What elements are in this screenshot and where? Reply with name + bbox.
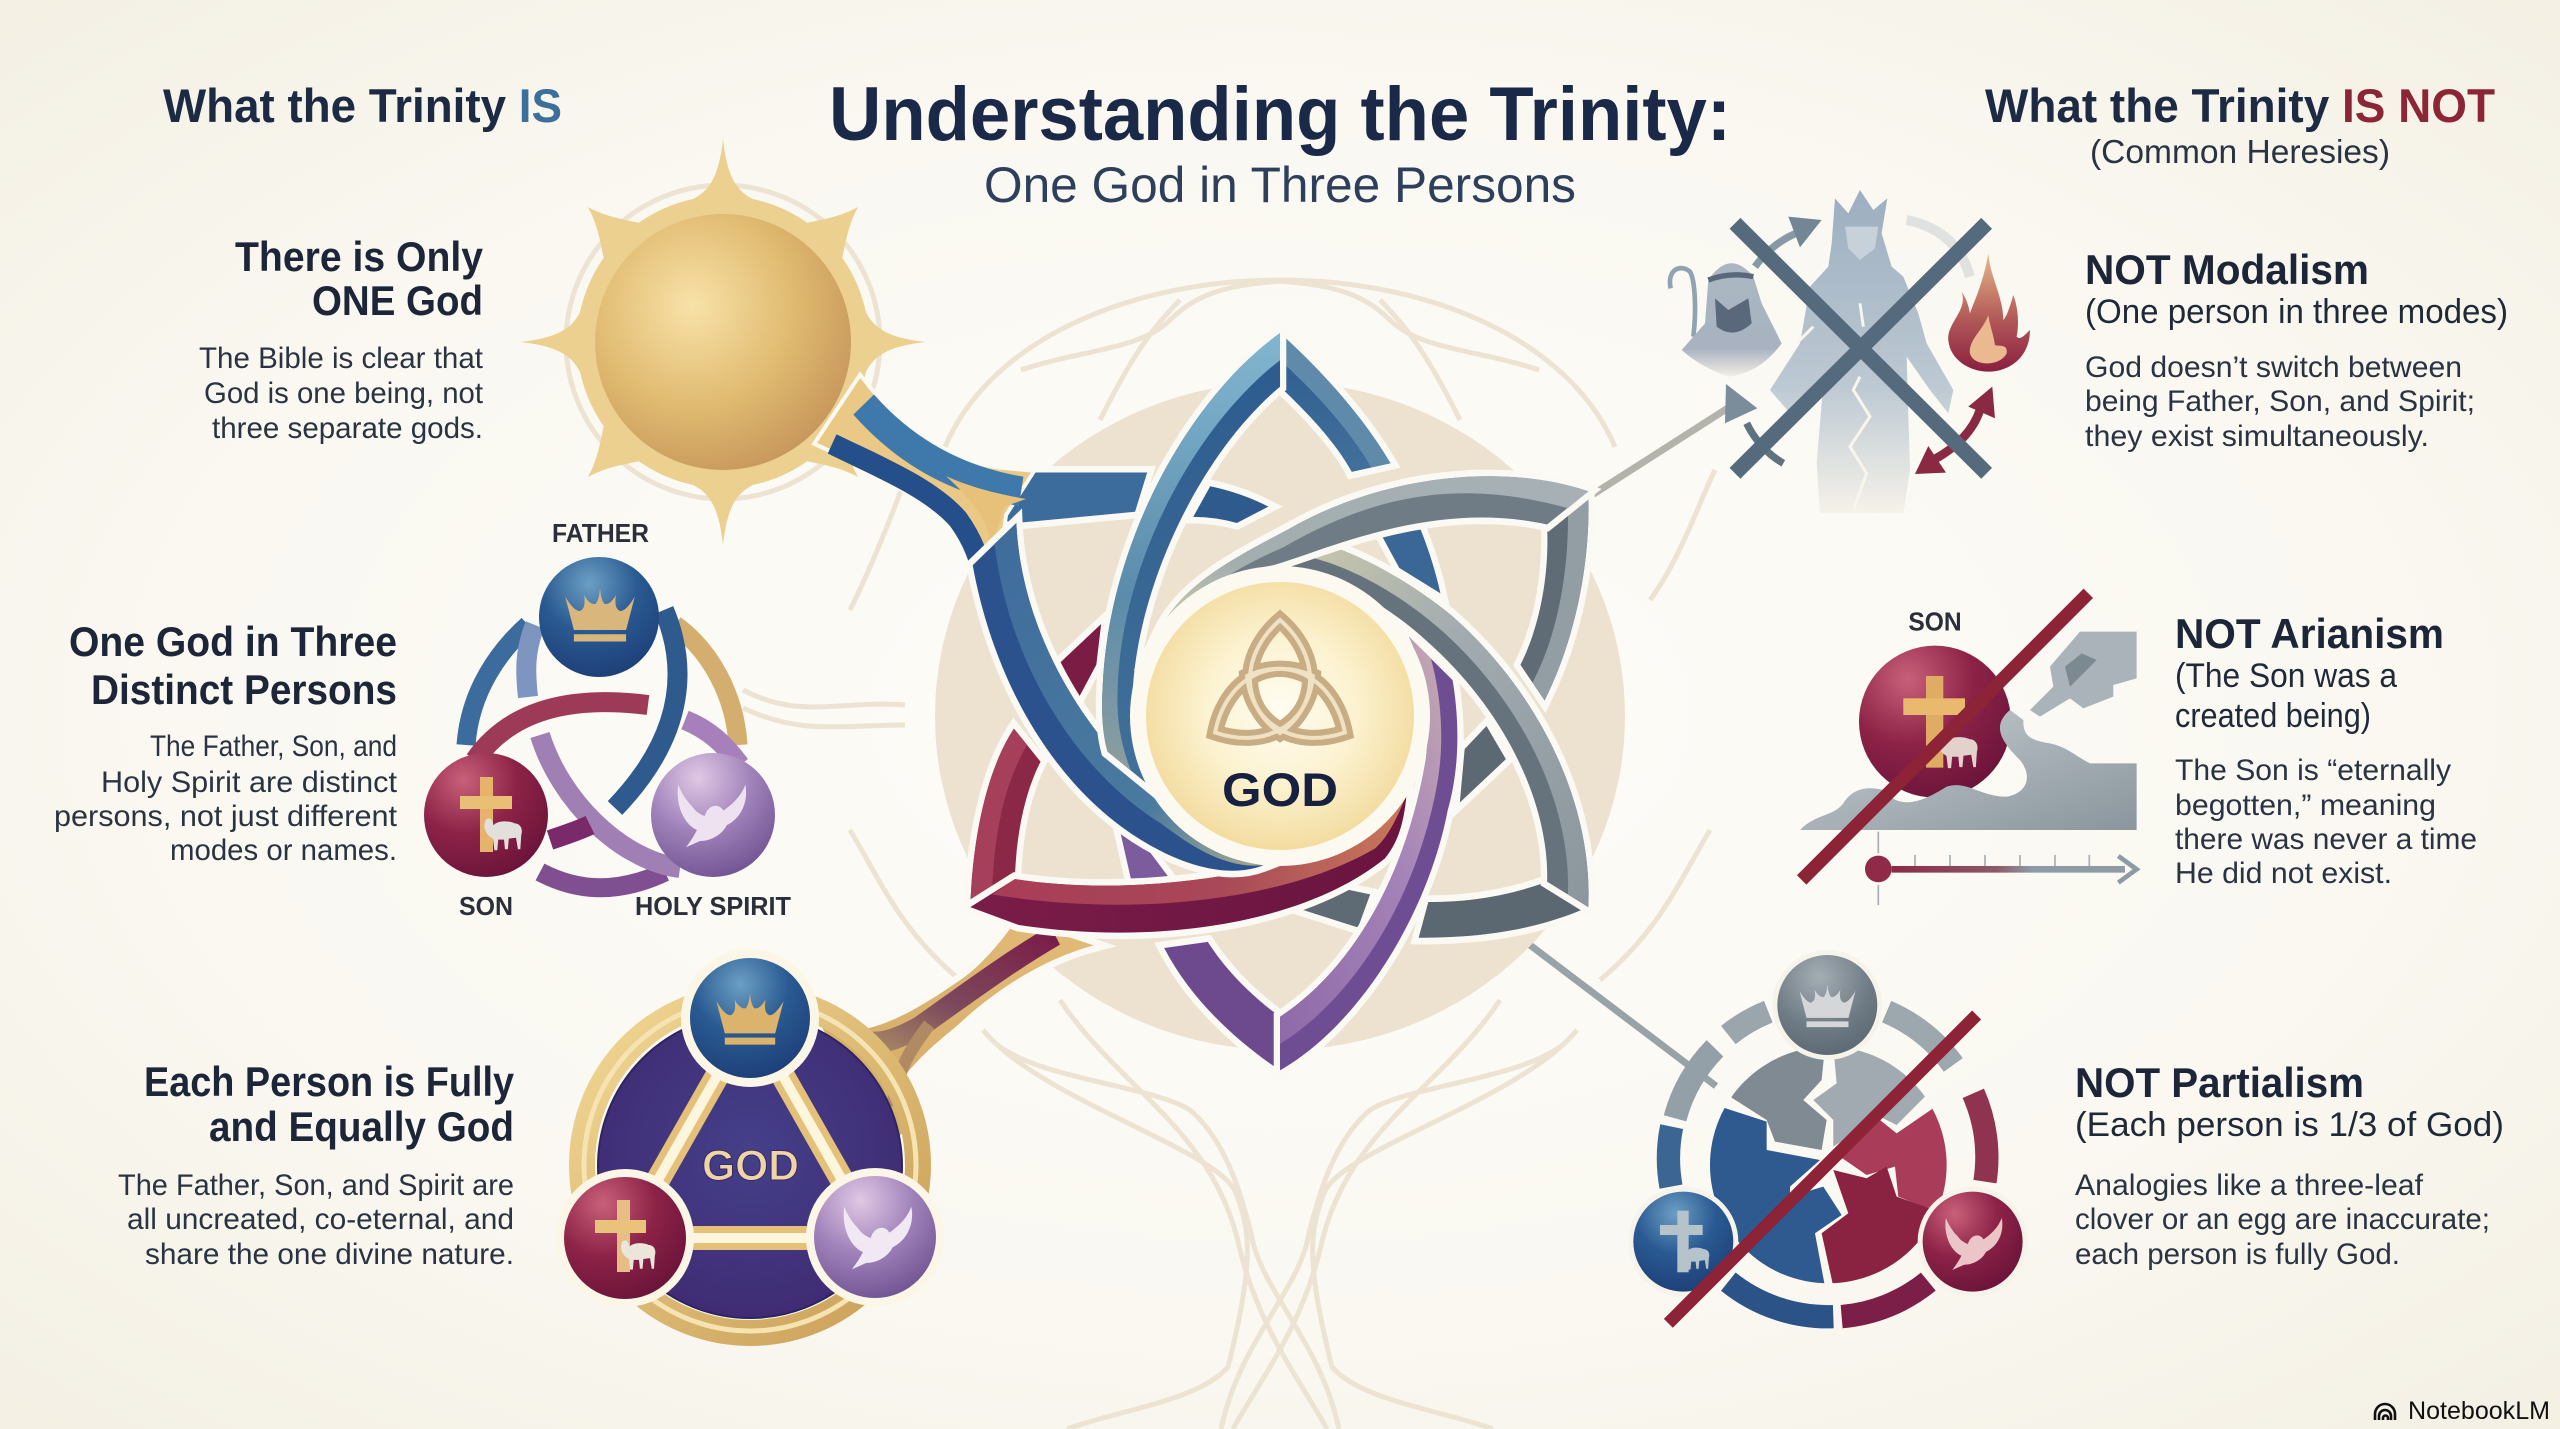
band: blue upper-left short arm and piece (997, 472, 1268, 523)
band: red short arm and piece (970, 624, 1101, 907)
text block: not modalism (2085, 246, 2508, 453)
text block: each person fully God: Each Person is Fully (144, 1058, 515, 1105)
text block: only one God: ONE God (312, 277, 483, 324)
icon: flame (1948, 253, 2030, 372)
band: blue top right arm and piece (1280, 333, 1440, 593)
text block: only one God: three separate gods. (212, 412, 483, 445)
text block: one God in three distinct persons: Holy Spirit are distinct (101, 766, 398, 799)
logo: NotebookLM: NotebookLM (2408, 1397, 2550, 1425)
text block: not partialism: Analogies like a three-leaf (2075, 1169, 2424, 1202)
figure: shepherd with staff (1670, 263, 1782, 377)
diagram: Arianism crossed out (1800, 593, 2137, 905)
text block: not Arianism (2175, 610, 2477, 890)
text block: one God in three distinct persons: The Father, Son, and (150, 730, 397, 763)
text block: each person fully God: all uncreated, co-eternal, and (127, 1203, 514, 1236)
text block: only one God (199, 233, 484, 445)
text block: not Arianism: begotten,” meaning (2175, 789, 2436, 822)
node: Father (539, 557, 659, 677)
text block: not partialism: clover or an egg are inaccurate; (2075, 1203, 2490, 1236)
band: red long arc (970, 795, 1407, 933)
band: grey lower-right short arm and piece (1302, 882, 1588, 938)
icon: sun representing one God (520, 139, 926, 545)
text block: one God in three distinct persons: Distinct Persons (91, 666, 397, 713)
text block: not Arianism: He did not exist. (2175, 857, 2392, 890)
heading: what the Trinity is not: What the Trinity IS NOT (1985, 79, 2495, 132)
arrow: grey upper (1755, 217, 1822, 267)
beige disc (935, 382, 1625, 1050)
text block: not modalism: (One person in three modes) (2085, 293, 2508, 331)
diagram: equal persons gold panel (556, 949, 944, 1333)
node: Holy Spirit (651, 753, 775, 877)
gold ring (582, 997, 918, 1333)
node: Holy Spirit (806, 1168, 944, 1306)
arrow: connector to modalism (1592, 408, 1728, 495)
band: grey upper-right long arc (1159, 476, 1588, 632)
text block: not partialism: (Each person is 1/3 of God) (2075, 1106, 2504, 1144)
node: Father greyed (1772, 950, 1882, 1060)
text block: only one God: There is Only (235, 233, 484, 280)
background pattern: faint sacred geometry lines (743, 280, 1715, 1429)
band: grey upper-right short arm and piece (1460, 491, 1589, 803)
subtitle: One God in Three Persons (984, 157, 1576, 213)
text block: each person fully God: share the one divine nature. (145, 1238, 514, 1271)
diagram: partialism crossed out (1628, 950, 2028, 1323)
cross-out X (1735, 223, 1987, 473)
triangle of light (625, 1018, 875, 1238)
text block: not Arianism: NOT Arianism (2175, 610, 2444, 657)
label: Father: FATHER (552, 518, 649, 548)
text block: one God in three distinct persons (54, 618, 398, 867)
band: purple short arm and piece (1121, 833, 1280, 1070)
text block: each person fully God (118, 1058, 515, 1271)
text block: one God in three distinct persons: One God in Three (69, 618, 397, 665)
text block: not modalism: God doesn’t switch between (2085, 351, 2462, 384)
band: purple long arc (1280, 637, 1457, 1070)
heading: what the Trinity is not: (Common Heresies) (2090, 133, 2390, 170)
text block: not partialism: each person is fully God. (2075, 1238, 2400, 1271)
interlaced strands (475, 610, 740, 868)
diagram: Father, Son, Holy Spirit knot (424, 518, 791, 921)
figure: shattered king (1770, 190, 1953, 513)
label: Holy Spirit: HOLY SPIRIT (635, 891, 791, 921)
band: blue long arc (973, 523, 1264, 871)
label: GOD: GOD (702, 1142, 799, 1190)
text block: not partialism: NOT Partialism (2075, 1059, 2364, 1106)
connector: sun to blue band (817, 378, 1031, 591)
title: Understanding the Trinity: (829, 72, 1731, 157)
text block: not modalism: they exist simultaneously. (2085, 420, 2429, 453)
text block: not modalism: being Father, Son, and Spirit; (2085, 385, 2475, 418)
node: Spirit red (1918, 1187, 2028, 1297)
cross-out strike (1802, 593, 2088, 880)
icon: triquetra knot (1200, 620, 1360, 758)
label: Son: SON (459, 891, 513, 921)
text block: not Arianism: The Son is “eternally (2175, 754, 2451, 787)
connector: gold panel to red band (808, 920, 1094, 1142)
band: grey lower-right long arc (1273, 545, 1589, 907)
timeline (1865, 832, 2137, 905)
navy disc (598, 1014, 902, 1318)
cross-out strike (1668, 1015, 1977, 1323)
heading: what the Trinity is: What the Trinity IS (163, 79, 562, 132)
text block: one God in three distinct persons: persons, not just different (54, 800, 398, 833)
label: GOD: GOD (1222, 763, 1338, 816)
text block: each person fully God: and Equally God (209, 1103, 514, 1150)
node: Son (424, 753, 548, 877)
outer ring arcs (466, 625, 738, 888)
node: Son blue (1628, 1187, 1738, 1297)
arrow: connector to arianism (1624, 716, 1862, 724)
icon: clay being sculpted (1800, 710, 2137, 830)
central God circle (1130, 566, 1430, 866)
label: Son: SON (1908, 607, 1962, 637)
text block: one God in three distinct persons: modes or names. (170, 834, 397, 867)
text block: not partialism (2075, 1059, 2504, 1271)
arrow: grey lower (1725, 384, 1783, 463)
band: blue top left arc (1102, 333, 1280, 790)
node: Father (681, 949, 819, 1087)
broken outer ring (1668, 1012, 1987, 1317)
icon: sculpting hand (2030, 632, 2137, 717)
arrow: connector to partialism (1518, 936, 1716, 1086)
node: Son sphere (1859, 646, 2011, 798)
text block: not Arianism: (The Son was a (2175, 657, 2397, 695)
text block: not modalism: NOT Modalism (2085, 246, 2369, 293)
text block: only one God: God is one being, not (204, 377, 484, 410)
text block: not Arianism: there was never a time (2175, 823, 2477, 856)
shattered disk (1700, 1047, 1953, 1287)
central trinity knot (808, 333, 1625, 1142)
heading: what the Trinity is not (1985, 79, 2495, 170)
text block: each person fully God: The Father, Son, and Spirit are (118, 1169, 514, 1202)
arrow: red double (1915, 387, 1995, 474)
text block: only one God: The Bible is clear that (199, 342, 484, 375)
text block: not Arianism: created being) (2175, 697, 2371, 735)
node: Son (556, 1169, 694, 1307)
diagram: modalism crossed out (1670, 190, 2030, 513)
